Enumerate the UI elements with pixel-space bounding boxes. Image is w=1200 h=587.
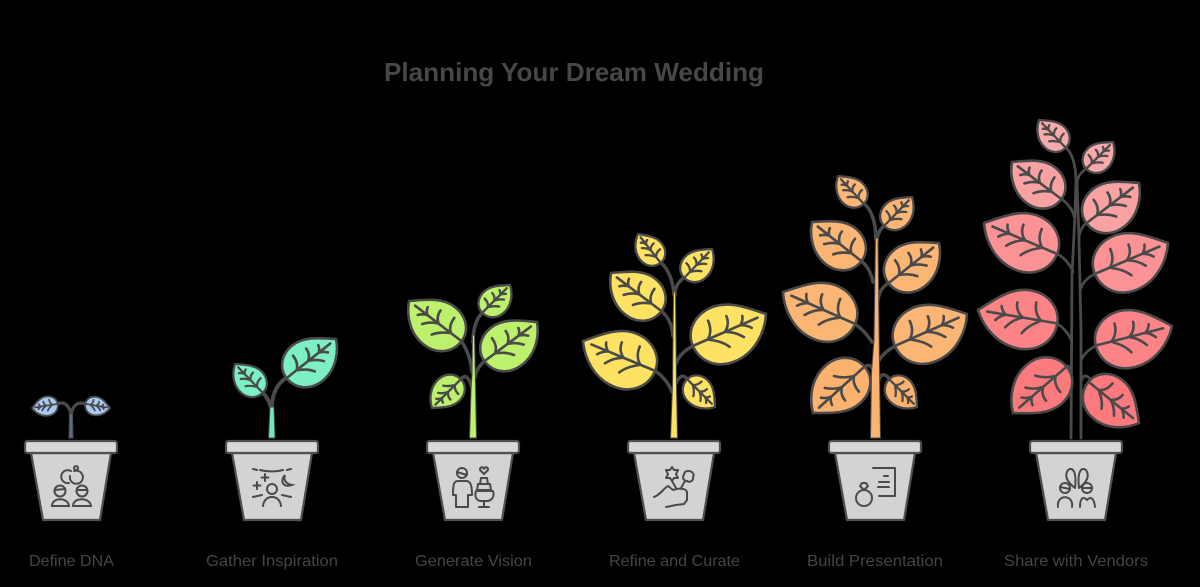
pot [1030, 441, 1122, 520]
label: Define DNA: Define DNA [29, 553, 114, 570]
step 5: Build Presentation [771, 167, 979, 520]
label: Share with Vendors: Share with Vendors [1004, 553, 1148, 570]
icon: hand holding flowers [654, 467, 694, 507]
step 1: Define DNA [25, 395, 117, 520]
icon: stars, moon and person [253, 469, 292, 506]
pot [829, 441, 921, 520]
pot [25, 441, 117, 520]
icon: heart and two people [1058, 469, 1095, 507]
pot [226, 441, 318, 520]
step 2: Gather Inspiration [224, 322, 351, 520]
label: Generate Vision: Generate Vision [415, 553, 532, 570]
label: Gather Inspiration: Gather Inspiration [206, 553, 338, 570]
plant: eight leaves [771, 167, 979, 438]
plant: seedling [31, 395, 111, 438]
step 6: Share with Vendors [972, 111, 1180, 520]
title: Planning Your Dream Wedding [384, 57, 764, 87]
plant: four leaves [393, 275, 552, 438]
icon: ring and document [856, 468, 895, 506]
label: Refine and Curate: Refine and Curate [609, 553, 740, 570]
plant: six leaves [571, 226, 778, 438]
pot [628, 441, 720, 520]
step 3: Generate Vision [393, 275, 552, 520]
icon: rings and couple [52, 466, 91, 506]
label: Build Presentation: Build Presentation [807, 553, 943, 570]
step 4: Refine and Curate [571, 226, 778, 520]
plant: ten leaves [972, 111, 1180, 443]
plant: two leaves [224, 322, 351, 438]
icon: groom and cake [453, 467, 494, 507]
pot [427, 441, 519, 520]
